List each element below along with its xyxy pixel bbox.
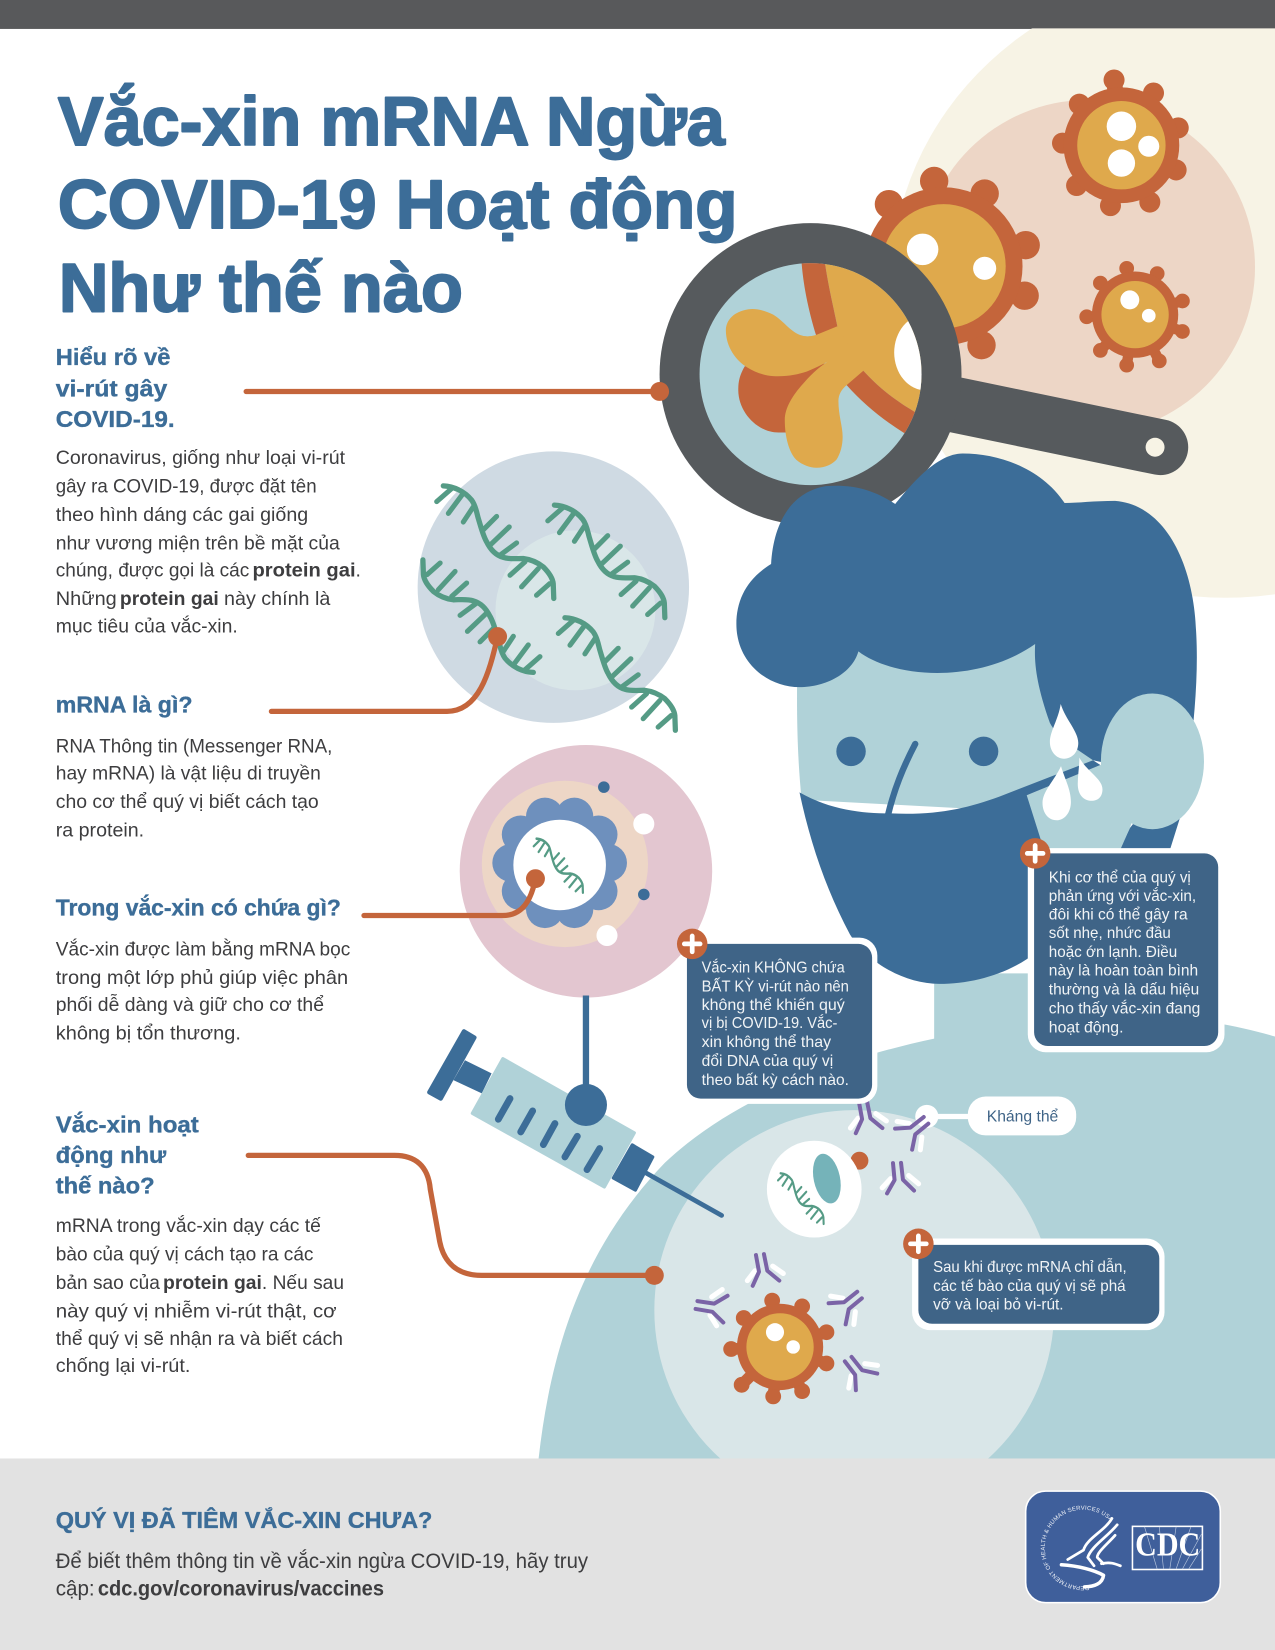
body text: này quý vị nhiễm vi-rút thật, cơ xyxy=(56,1299,337,1322)
antibody label: Kháng thể xyxy=(987,1108,1059,1126)
icon: antibodies xyxy=(692,1102,937,1393)
title: Vắc-xin mRNA Ngừa xyxy=(58,83,726,160)
body text xyxy=(56,447,361,637)
body text: cho cơ thể quý vị biết cách tạo xyxy=(56,791,319,813)
body text: mục tiêu của vắc-xin. xyxy=(56,614,238,637)
callout text: phản ứng với vắc-xin, xyxy=(1049,886,1196,905)
icon: magnifying glass xyxy=(660,223,1165,525)
body text: mRNA trong vắc-xin dạy các tế xyxy=(56,1214,321,1237)
handle hole xyxy=(1146,438,1165,457)
footer heading: QUÝ VỊ ĐÃ TIÊM VẮC-XIN CHƯA? xyxy=(56,1506,432,1533)
callout: side effects xyxy=(1020,838,1225,1052)
body text: bào của quý vị cách tạo ra các xyxy=(56,1244,314,1266)
title: Như thế nào xyxy=(59,250,463,326)
magnifier handle xyxy=(947,403,1160,447)
person body xyxy=(539,973,1275,1458)
icon: syringe xyxy=(429,1031,722,1215)
magnifier ring xyxy=(660,223,962,525)
body text: Vắc-xin được làm bằng mRNA bọc xyxy=(56,937,351,960)
body text: này chính là xyxy=(224,588,331,610)
logo: HHS and CDC xyxy=(1025,1490,1221,1604)
connector: mRNA heading to strand xyxy=(271,627,507,711)
body text: gây ra COVID-19, được đặt tên xyxy=(56,475,317,497)
callout text: không thể khiến quý xyxy=(702,996,845,1014)
callout text: hoạt động. xyxy=(1049,1019,1124,1036)
seal text: DEPARTMENT OF HEALTH & HUMAN SERVICES USA xyxy=(1040,1506,1112,1590)
connector: how it works to virus circle xyxy=(248,1155,664,1285)
callout text: này là hoàn toàn bình xyxy=(1049,962,1198,979)
footer text: Để biết thêm thông tin về vắc-xin ngừa COVID-19, hãy truy xyxy=(56,1550,589,1573)
footer text xyxy=(56,1550,589,1600)
body text: protein gai xyxy=(252,560,356,582)
text block: vaccine contents xyxy=(56,893,351,1045)
panel: vaccine particle circle xyxy=(460,745,712,998)
callout text: vỡ và loại bỏ vi-rút. xyxy=(933,1297,1064,1314)
text block: understanding the virus xyxy=(56,344,361,637)
body text: phối dễ dàng và giữ cho cơ thể xyxy=(56,993,324,1016)
person face xyxy=(797,631,1093,810)
body text: . Nếu sau xyxy=(262,1272,344,1294)
cream background circle xyxy=(891,0,1275,598)
icon: plus xyxy=(677,929,707,959)
heading: Hiểu rõ về xyxy=(56,344,171,370)
heading: vi-rút gây xyxy=(56,376,167,402)
footer text: cập: xyxy=(56,1577,95,1600)
body text xyxy=(56,1214,344,1377)
icon: virus under attack xyxy=(731,1301,826,1396)
heading: COVID-19. xyxy=(56,406,175,432)
body text: hay mRNA) là vật liệu di truyền xyxy=(56,763,321,785)
body text: Coronavirus, giống như loại vi-rút xyxy=(56,447,346,469)
icon: white droplets xyxy=(1043,704,1102,820)
injection site circle xyxy=(654,1110,1053,1458)
body text: chúng, được gọi là các xyxy=(56,560,250,582)
callout text: BẤT KỲ vi-rút nào nên xyxy=(702,976,849,995)
callout text: hoặc ớn lạnh. Điều xyxy=(1049,944,1177,961)
body text: ra protein. xyxy=(56,820,144,842)
panel: DNA circle xyxy=(418,451,689,730)
text block: what is mRNA xyxy=(56,691,332,842)
icon: eagle xyxy=(1061,1518,1120,1587)
magnified virus in lens xyxy=(700,263,922,486)
body text: RNA Thông tin (Messenger RNA, xyxy=(56,735,332,757)
body text: protein gai xyxy=(163,1272,262,1294)
body text: chống lại vi-rút. xyxy=(56,1355,190,1377)
callout text: đổi DNA của quý vị xyxy=(702,1052,833,1070)
callout text xyxy=(1049,868,1200,1036)
footer panel xyxy=(0,1458,1275,1650)
CDC mark: CDC xyxy=(1135,1526,1200,1563)
body text: như vương miện trên bề mặt của xyxy=(56,532,340,554)
callout text: theo bất kỳ cách nào. xyxy=(702,1072,849,1089)
title xyxy=(58,83,737,326)
callout: vaccine contains no virus xyxy=(677,929,877,1104)
icon: body cell with mRNA xyxy=(767,1141,868,1238)
body text: protein gai xyxy=(120,588,219,610)
body text: Những xyxy=(56,588,117,610)
peach background circle xyxy=(920,100,1255,435)
antibody label xyxy=(915,1096,1076,1135)
icon: mRNA strands xyxy=(423,486,675,730)
callout text xyxy=(933,1257,1127,1314)
person ear xyxy=(1101,693,1204,829)
neck patch beside mask xyxy=(1027,765,1147,850)
top bar xyxy=(0,0,1275,29)
body text xyxy=(56,937,351,1045)
body text: theo hình dáng các gai giống xyxy=(56,504,308,526)
callout text: xin không thể thay xyxy=(702,1033,831,1051)
body text: trong một lớp phủ giúp việc phân xyxy=(56,967,348,989)
callout text: các tế bào của quý vị sẽ phá xyxy=(933,1278,1126,1295)
connector: vaccine to syringe xyxy=(565,995,607,1126)
heading xyxy=(56,344,175,432)
text block: how the vaccine works xyxy=(56,1110,344,1377)
person hair xyxy=(736,454,1197,850)
body text: bản sao của xyxy=(56,1272,160,1294)
callout text xyxy=(702,957,849,1089)
icon: virus behind magnifier xyxy=(865,181,1026,345)
callout text: cho thấy vắc-xin đang xyxy=(1049,998,1200,1017)
heading: Vắc-xin hoạt xyxy=(56,1110,199,1137)
connector: heading 1 to magnifier xyxy=(246,382,669,401)
heading xyxy=(56,1110,199,1198)
body text xyxy=(56,735,332,842)
heading: động như xyxy=(56,1142,166,1168)
connector: vaccine contents to particle xyxy=(364,869,545,915)
callout text: thường và là dấu hiệu xyxy=(1049,981,1199,998)
callout text: vị bị COVID-19. Vắc- xyxy=(702,1013,837,1032)
heading: Trong vắc-xin có chứa gì? xyxy=(56,893,341,920)
icon: small virus right xyxy=(1087,268,1182,365)
face mask xyxy=(800,760,1100,984)
heading: thế nào? xyxy=(56,1172,155,1198)
callout text: Sau khi được mRNA chỉ dẫn, xyxy=(933,1257,1127,1276)
icon: plus xyxy=(1020,838,1050,869)
callout text: Vắc-xin KHÔNG chứa xyxy=(702,957,845,976)
body text: . xyxy=(356,560,361,582)
heading: mRNA là gì? xyxy=(56,691,193,717)
icon: plus xyxy=(903,1229,934,1259)
callout: cells destroy virus xyxy=(903,1229,1165,1330)
body text: không bị tổn thương. xyxy=(56,1023,241,1045)
icon: lipid coating xyxy=(492,798,627,928)
callout text: Khi cơ thể của quý vị xyxy=(1049,868,1191,886)
body text: thể quý vị sẽ nhận ra và biết cách xyxy=(56,1328,343,1350)
icon: virus top right xyxy=(1062,80,1179,206)
icon: nose xyxy=(888,744,915,816)
callout text: đôi khi có thể gây ra xyxy=(1049,906,1188,924)
footer text: cdc.gov/coronavirus/vaccines xyxy=(98,1577,384,1600)
icon: eyes xyxy=(836,737,998,766)
title: COVID-19 Hoạt động xyxy=(58,167,737,243)
callout text: sốt nhẹ, nhức đầu xyxy=(1049,925,1171,942)
